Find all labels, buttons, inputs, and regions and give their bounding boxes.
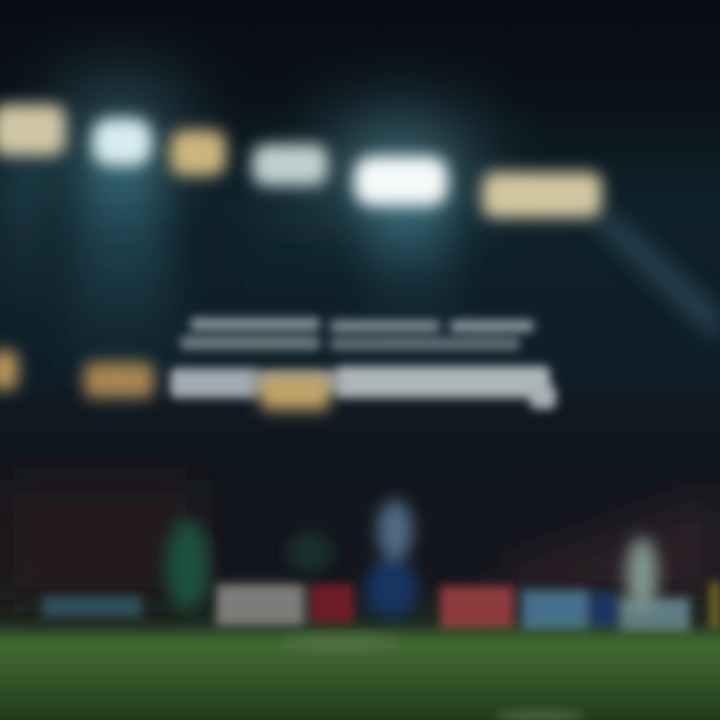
grass pitch	[0, 632, 720, 720]
stadium floodlights	[0, 104, 602, 218]
glow behind lights	[60, 85, 470, 210]
advertising boards	[42, 582, 720, 634]
light beams	[0, 150, 460, 400]
blurred sign text	[170, 318, 556, 409]
amber sign lights	[0, 350, 330, 410]
players	[166, 500, 658, 618]
right streak	[590, 215, 720, 345]
crowd	[0, 480, 720, 600]
